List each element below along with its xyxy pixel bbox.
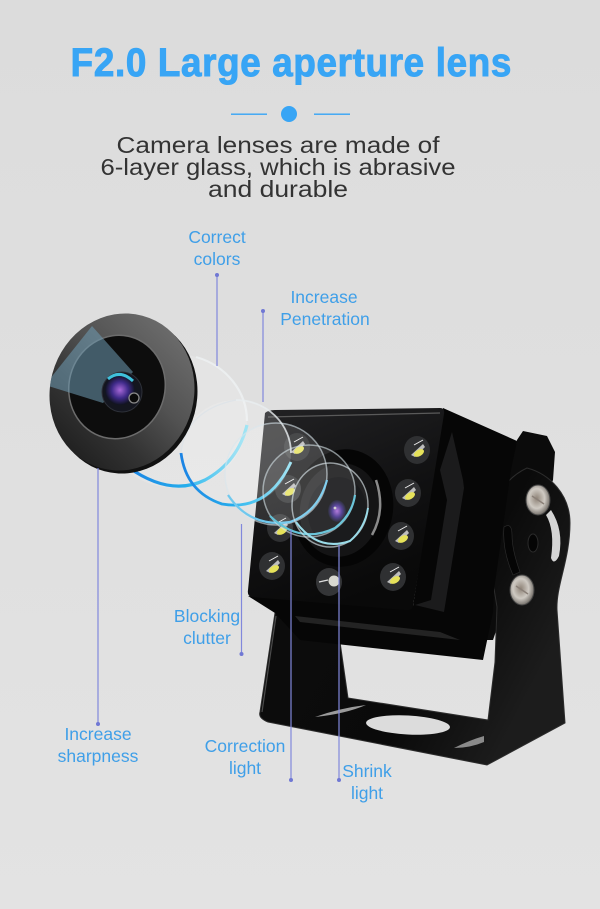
label: increase sharpness [58, 724, 139, 766]
label: correct colors: Correct [188, 227, 246, 247]
label: blocking clutter: clutter [183, 628, 231, 648]
light sensor [316, 568, 342, 596]
label: correction light: light [229, 758, 261, 778]
subtitle text: 6-layer glass, which is abrasive [100, 154, 456, 180]
glass disc 4 [263, 445, 355, 537]
glass disc 1 [103, 354, 247, 488]
screws [510, 485, 550, 605]
label: correct colors: colors [194, 249, 241, 269]
side glossy panel [415, 432, 464, 612]
subtitle text: Camera lenses are made of [116, 132, 440, 158]
callout line: correct colors [215, 273, 219, 366]
subtitle text: and durable [208, 176, 348, 202]
divider ornament [231, 106, 350, 122]
label: shrink light: Shrink [342, 761, 392, 781]
callout line: increase penetration [261, 309, 265, 402]
camera assembly [248, 408, 570, 765]
bracket slots [504, 510, 560, 575]
label: increase penetration: Penetration [280, 309, 370, 329]
callout line: increase sharpness [96, 468, 100, 726]
label: blocking clutter [174, 606, 240, 648]
lens tip [129, 393, 139, 403]
callout line: blocking clutter [240, 524, 244, 656]
side of housing and underside [248, 408, 517, 660]
label: increase penetration [280, 287, 370, 329]
U bracket [260, 468, 570, 765]
inner lens well [57, 324, 177, 450]
label: increase sharpness: sharpness [58, 746, 139, 766]
front lens disc [50, 314, 198, 474]
front face bevel [268, 413, 440, 417]
title: F2.0 Large aperture lens [71, 41, 511, 85]
label: increase sharpness: Increase [64, 724, 132, 744]
bracket base holes [315, 705, 484, 748]
label: shrink light: light [351, 783, 383, 803]
callout line: correction light [289, 530, 293, 782]
label: correction light: Correction [205, 736, 285, 756]
label: correction light [205, 736, 285, 778]
glass disc 5 [292, 463, 368, 547]
label: blocking clutter: Blocking [174, 606, 240, 626]
lens barrel [284, 441, 402, 575]
glass disc 3 [225, 423, 327, 525]
callout line: shrink light [337, 545, 341, 782]
bracket highlight [262, 616, 276, 712]
LED lights [259, 433, 430, 591]
label: correct colors [188, 227, 246, 269]
front face [248, 408, 444, 610]
subtitle text [100, 132, 456, 202]
lens glass [102, 372, 142, 412]
bracket centre hole [528, 534, 538, 552]
lower housing lip [295, 616, 460, 640]
label: increase penetration: Increase [290, 287, 358, 307]
rear housing behind bracket [470, 431, 555, 640]
glass lens layers [103, 354, 368, 547]
label: shrink light [342, 761, 392, 803]
glass disc 2 [181, 400, 291, 506]
translucent reflection wedge [45, 326, 133, 403]
